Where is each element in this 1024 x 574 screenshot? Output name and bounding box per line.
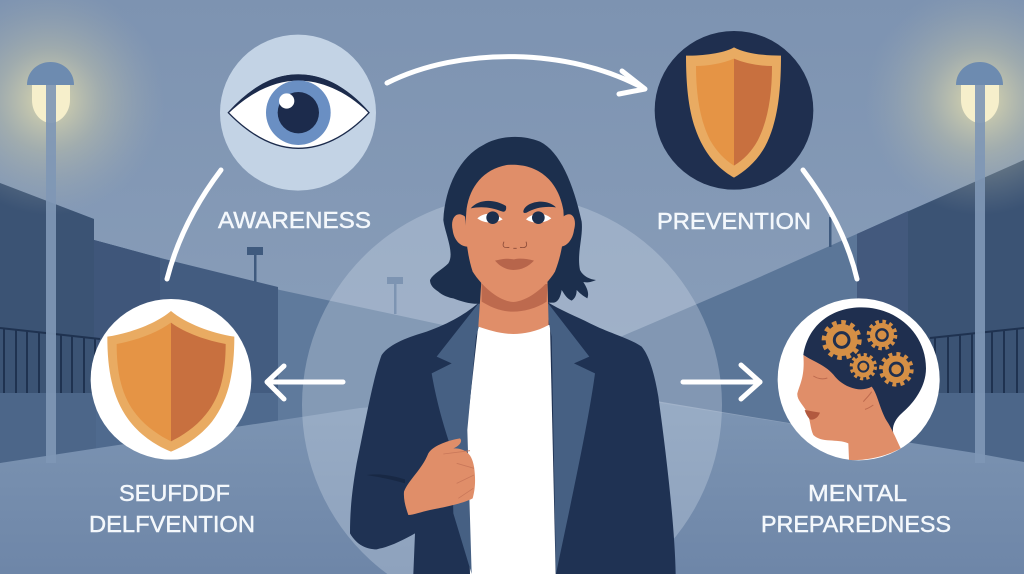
lamp dome — [27, 62, 74, 85]
right street lamp — [865, 0, 1024, 463]
background: left buildings — [0, 183, 443, 463]
background: right fence — [930, 328, 1024, 393]
label: prevention: PREVENTION — [657, 208, 811, 234]
arc: prevention to mental preparedness — [803, 170, 857, 279]
iris — [266, 80, 331, 145]
head badge — [778, 298, 940, 460]
icon: mental preparedness head with gears — [778, 298, 940, 460]
gear two — [869, 322, 895, 348]
shield badge — [91, 299, 251, 460]
arrow: awareness to prevention — [387, 57, 645, 94]
upper lid — [229, 74, 368, 113]
lamp pole — [46, 85, 56, 463]
lamp bulb — [961, 85, 999, 123]
pupil — [278, 92, 319, 133]
shield right half — [734, 59, 772, 166]
lips — [805, 410, 820, 420]
lamp glow — [0, 0, 165, 215]
shield rim — [686, 47, 781, 178]
label: mental: MENTAL — [808, 480, 907, 506]
head hair — [803, 307, 926, 433]
closed eye and ear lines — [813, 376, 873, 409]
eye white — [228, 75, 369, 148]
face — [466, 165, 564, 302]
shield left half — [117, 323, 171, 441]
hair — [430, 137, 596, 304]
neck — [478, 277, 549, 334]
shirt — [467, 325, 556, 574]
label: self-defense line one: SEUFDDF — [119, 480, 230, 506]
arc: self-defense to awareness — [167, 170, 221, 279]
left street lamp — [0, 0, 165, 463]
right lapel — [546, 301, 595, 574]
icon: prevention shield — [655, 31, 813, 190]
hand — [404, 438, 475, 515]
gear four — [882, 355, 911, 384]
neck shadow — [482, 284, 547, 312]
highlight — [279, 93, 294, 109]
shield rim — [107, 311, 234, 452]
background: ground — [0, 398, 1024, 574]
label: preparedness: PREPAREDNESS — [761, 511, 951, 537]
pupils — [486, 211, 545, 224]
gear one — [825, 323, 858, 357]
shield left half — [696, 59, 734, 166]
arrow: person to self-defense — [267, 366, 343, 399]
nose — [503, 242, 527, 248]
central person — [350, 137, 676, 574]
label: awareness: AWARENESS — [218, 207, 371, 233]
background: distant lamp behind circle — [387, 277, 403, 314]
icon: awareness eye — [220, 35, 376, 191]
shield badge — [655, 31, 813, 190]
jacket — [350, 302, 676, 574]
gear three — [852, 355, 875, 378]
background: distant lamp right — [829, 217, 832, 247]
label: self-defense line two: DELFVENTION — [89, 511, 255, 537]
lamp glow — [865, 0, 1024, 215]
left lapel — [432, 301, 481, 574]
eye badge — [220, 35, 376, 191]
face and neck — [797, 355, 901, 460]
lamp pole — [975, 85, 985, 463]
background: left fence — [0, 328, 100, 393]
lamp dome — [956, 62, 1003, 85]
shield right half — [171, 323, 226, 441]
eyebrows — [471, 201, 556, 213]
jacket sleeve fold — [367, 474, 405, 483]
central translucent circle — [302, 195, 722, 574]
fingers — [443, 451, 474, 498]
background: distant lamp left — [247, 247, 263, 282]
icon: self-defense shield — [91, 299, 251, 460]
mouth — [495, 259, 534, 270]
background: right buildings — [620, 160, 1024, 462]
lamp bulb — [32, 85, 70, 123]
ears — [452, 214, 575, 247]
arrow: person to mental preparedness — [683, 365, 760, 399]
eye whites — [477, 214, 551, 223]
